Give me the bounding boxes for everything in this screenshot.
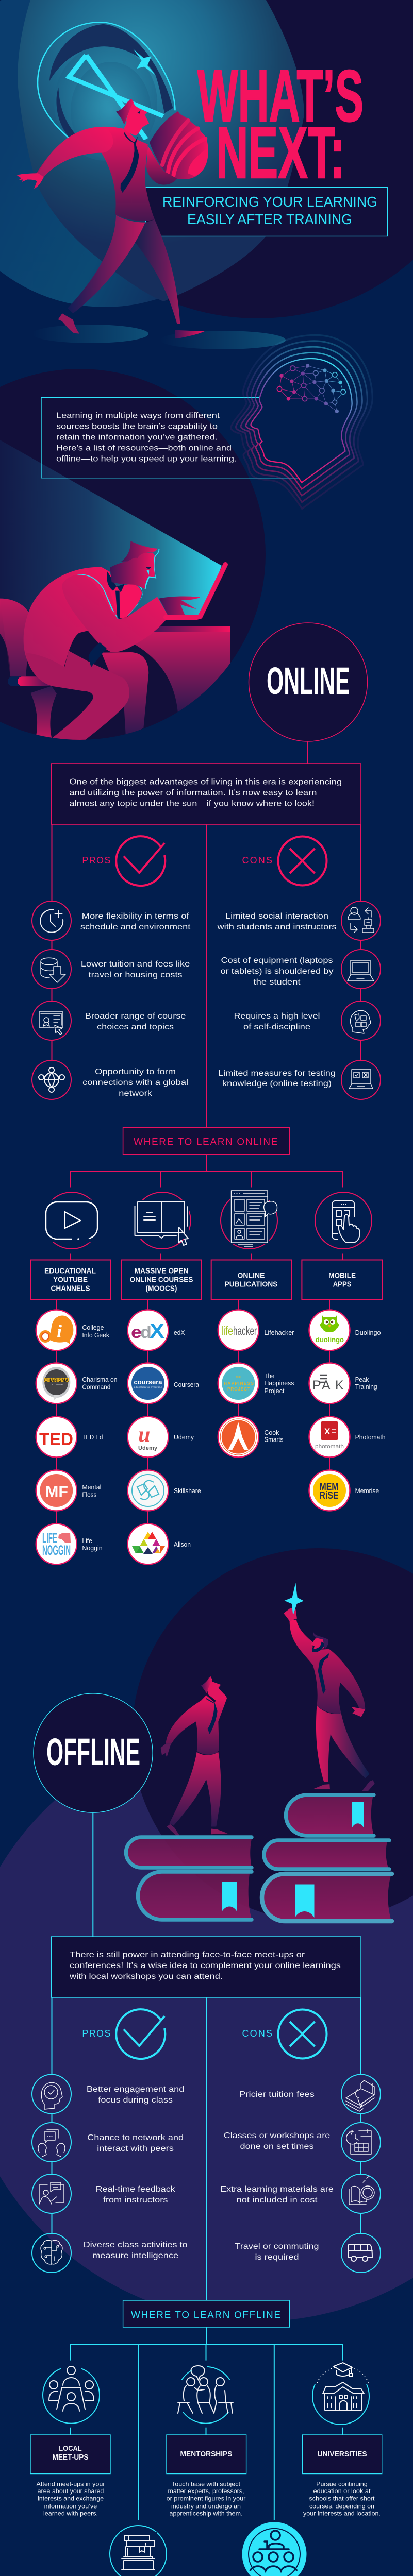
pro 3: feedback: from instructors — [103, 2196, 168, 2205]
where to learn offline heading: WHERE TO LEARN OFFLINE — [131, 2310, 280, 2320]
labels: mentorships: or prominent figures in your — [167, 2495, 245, 2502]
intro text box: Here’s a list of resources—both online and — [56, 444, 232, 452]
channel names: column one: Command — [82, 1383, 110, 1391]
pro 4: global network: Opportunity to form — [95, 1067, 176, 1076]
course logos: column two: e — [131, 1323, 142, 1342]
labels: universities: your interests and location. — [303, 2510, 381, 2517]
app logos: column four: RiSE — [320, 1490, 338, 1501]
con 3: extra materials — [220, 2174, 381, 2213]
labels: local meet-ups: learned with peers. — [43, 2510, 98, 2517]
connector lines: online pros and cons — [52, 741, 361, 1544]
publication logos: column three: life — [221, 1324, 233, 1337]
online intro panel: almost any topic under the sun—if you know where to look! — [69, 799, 315, 808]
app logos: column four: MEM — [320, 1481, 338, 1493]
intro text box — [41, 398, 298, 478]
pro 3: course choices — [32, 1001, 186, 1040]
labels: universities: education or look at — [313, 2487, 371, 2495]
publication names: column three: Happiness — [264, 1379, 294, 1387]
publication names: column three: The — [264, 1372, 274, 1380]
app names: column four: Peak — [355, 1376, 369, 1383]
cons heading online: CONS — [242, 855, 272, 866]
app logos: column four: P — [312, 1378, 321, 1393]
cons heading online — [242, 837, 327, 885]
channel names: column one — [82, 1324, 117, 1552]
icon: online publications — [221, 1190, 277, 1249]
channel logos: column one: TED — [39, 1430, 73, 1449]
offline intro panel: with local workshops you can attend. — [69, 1972, 223, 1981]
cons heading offline — [242, 2009, 327, 2059]
app logos: column four: K — [335, 1378, 344, 1393]
offline intro panel — [52, 1937, 361, 1997]
con 3: self-discipline: of self-discipline — [243, 1023, 310, 1031]
pro 1: engagement: focus during class — [98, 2096, 173, 2105]
channel logos: column one: CHARISMA — [44, 1378, 69, 1383]
publication logos: column three — [218, 1310, 259, 1457]
cons heading offline: CONS — [242, 2028, 272, 2039]
icon: local meet-ups — [43, 2365, 100, 2424]
labels: universities: UNIVERSITIES — [318, 2450, 367, 2459]
subtitle box — [145, 188, 388, 236]
course names: column two: Udemy — [174, 1433, 194, 1441]
publication names: column three — [264, 1329, 294, 1444]
light beam from laptop — [0, 440, 222, 616]
icon: books — [110, 2526, 167, 2576]
labels: mentorships: matter experts, professors, — [168, 2487, 244, 2495]
course names: column two: edX — [174, 1329, 185, 1336]
app logos: column four: X — [324, 1427, 331, 1436]
publication logos: column three: PROJECT — [227, 1386, 251, 1392]
pros heading online — [82, 836, 165, 886]
con 3: self-discipline — [234, 1001, 381, 1040]
pro 4: global network: network — [119, 1089, 153, 1098]
intro text box: retain the information you’ve gathered. — [56, 433, 218, 442]
category labels online: MASSIVE OPEN — [134, 1266, 189, 1275]
con 2: set times — [224, 2123, 381, 2162]
publication names: column three: Cook — [264, 1429, 279, 1436]
pro 2: lower fees: Lower tuition and fees like — [81, 960, 190, 969]
category labels online: EDUCATIONAL — [44, 1266, 96, 1275]
labels: local meet-ups — [30, 2435, 110, 2517]
con 4: travel: Travel or commuting — [235, 2242, 319, 2251]
subtitle box: REINFORCING YOUR LEARNING — [162, 194, 377, 210]
intro text box: Learning in multiple ways from different — [56, 411, 220, 420]
channel logos: column one: i — [57, 1321, 62, 1342]
con 2: equipment cost: Cost of equipment (laptops — [221, 956, 333, 965]
online intro panel — [52, 764, 361, 824]
channel logos: column one — [36, 1310, 77, 1564]
labels: universities — [302, 2435, 382, 2517]
channel names: column one: Mental — [82, 1483, 101, 1491]
app logos: column four: A — [322, 1378, 331, 1393]
channel names: column one: Life — [82, 1537, 92, 1545]
publication logos: column three: HAPPINESS — [224, 1381, 254, 1386]
pros heading offline: PROS — [82, 2028, 110, 2039]
channel logos: column one: NOGGIN — [42, 1543, 71, 1558]
offline badge — [34, 1693, 153, 1812]
category labels online: ONLINE COURSES — [130, 1275, 193, 1284]
course logos: column two — [128, 1310, 168, 1564]
app names: column four: Duolingo — [355, 1329, 381, 1336]
labels: universities: Pursue continuing — [316, 2480, 368, 2487]
pro 2: networking: interact with peers — [97, 2144, 174, 2153]
publication logos: column three: hacker — [233, 1324, 257, 1337]
con 3: extra materials: Extra learning materials are — [220, 2185, 334, 2194]
category labels online: ONLINE — [237, 1271, 265, 1280]
intro text box: offline—to help you speed up your learning. — [56, 454, 237, 464]
online badge: ONLINE — [267, 659, 350, 702]
course logos: column two: Udemy — [138, 1445, 158, 1451]
publication names: column three: Smarts — [264, 1436, 284, 1444]
publication names: column three: Lifehacker — [264, 1329, 294, 1336]
con 1: limited interaction: with students and instructors — [217, 923, 336, 931]
labels: local meet-ups: area about your shared — [38, 2487, 104, 2495]
icon: mobile apps — [315, 1192, 372, 1249]
icon: massive online courses — [133, 1192, 191, 1249]
pro 2: networking: Chance to network and — [87, 2133, 184, 2142]
dark circle: online backdrop — [0, 369, 266, 740]
pro 4: global network: connections with a global — [82, 1078, 188, 1087]
con 1: limited interaction: Limited social interaction — [225, 912, 328, 921]
category labels online — [30, 1260, 383, 1299]
offline badge: OFFLINE — [46, 1731, 140, 1773]
pro 1: flexibility — [32, 901, 191, 940]
pro 3: feedback: Real-time feedback — [96, 2185, 176, 2194]
app logos: column four: duolingo — [316, 1336, 344, 1344]
con 2: equipment cost — [221, 950, 381, 989]
category labels online: CHANNELS — [51, 1284, 90, 1293]
con 4: online testing — [218, 1060, 381, 1099]
channel names: column one: TED Ed — [82, 1433, 103, 1441]
category labels online: (MOOCS) — [145, 1284, 177, 1293]
channel names: column one: Info Geek — [82, 1331, 109, 1339]
channel logos: column one: MF — [45, 1483, 68, 1500]
online badge — [249, 623, 367, 741]
con 3: extra materials: not included in cost — [236, 2196, 318, 2205]
pro 1: flexibility: schedule and environment — [80, 923, 191, 931]
hero backdrop: layered circles — [0, 0, 413, 318]
pro 3: course choices: choices and topics — [97, 1023, 174, 1031]
pro 4: activities: measure intelligence — [92, 2251, 178, 2260]
pro 3: feedback — [32, 2174, 176, 2213]
category labels online: YOUTUBE — [53, 1275, 88, 1284]
category labels online: MOBILE — [328, 1271, 356, 1280]
icon: youtube channels — [43, 1192, 100, 1249]
pro 4: activities: Diverse class activities to — [84, 2241, 188, 2249]
course names: column two: Skillshare — [174, 1487, 201, 1495]
con 2: set times: done on set times — [240, 2142, 313, 2151]
labels: universities: courses, depending on — [309, 2502, 374, 2510]
subtitle box: EASILY AFTER TRAINING — [187, 211, 352, 227]
app names: column four: Training — [355, 1383, 377, 1391]
labels: universities: schools that offer short — [309, 2495, 375, 2502]
icon: ring, triangle and star — [38, 22, 175, 139]
online intro panel: and utilizing the power of information. It’s now easy to learn — [69, 788, 317, 797]
course logos: column two: education for everyone — [134, 1386, 162, 1388]
course names: column two: Coursera — [174, 1381, 200, 1388]
where to learn online heading: WHERE TO LEARN ONLINE — [134, 1137, 277, 1147]
con 4: travel: is required — [255, 2253, 299, 2262]
icon: universities — [312, 2363, 369, 2425]
where to learn online heading — [123, 1127, 289, 1155]
labels: mentorships — [167, 2435, 246, 2517]
icon: mentorships — [175, 2365, 236, 2424]
con 2: set times: Classes or workshops are — [224, 2131, 330, 2140]
illustration: man carrying brain — [17, 99, 208, 338]
labels: local meet-ups: information you’ve — [44, 2502, 97, 2510]
pro 2: networking — [32, 2123, 184, 2162]
pros heading offline — [82, 2009, 165, 2059]
con 3: self-discipline: Requires a high level — [234, 1012, 320, 1021]
pro 4: activities — [32, 2233, 188, 2273]
labels: local meet-ups: MEET-UPS — [53, 2453, 89, 2462]
app names: column four — [355, 1329, 386, 1495]
channel names: column one: Floss — [82, 1490, 97, 1498]
labels: local meet-ups: interests and exchange — [38, 2495, 104, 2502]
channel logos: column one: LIFE — [42, 1530, 57, 1546]
title — [197, 55, 364, 194]
connector lines: offline pros and cons — [52, 1813, 361, 2576]
con 1: tuition: Pricier tuition fees — [239, 2090, 315, 2099]
where to learn offline heading — [123, 2300, 289, 2327]
pro 3: course choices: Broader range of course — [85, 1012, 186, 1021]
intro text box: sources boosts the brain’s capability to — [56, 422, 218, 431]
course logos: column two: coursera — [134, 1378, 162, 1386]
offline backdrop circles — [0, 1548, 413, 2321]
course names: column two — [174, 1329, 201, 1548]
labels: mentorships: apprenticeship with them. — [169, 2510, 242, 2517]
con 4: online testing: knowledge (online testing) — [222, 1079, 332, 1088]
app names: column four: Memrise — [355, 1487, 379, 1495]
pro 2: lower fees — [32, 950, 190, 989]
channel names: column one: College — [82, 1324, 104, 1331]
publication names: column three: Project — [264, 1387, 285, 1395]
labels: local meet-ups: Attend meet-ups in your — [36, 2480, 105, 2487]
con 4: travel — [235, 2233, 381, 2273]
con 1: limited interaction — [217, 901, 381, 940]
labels: local meet-ups: LOCAL — [59, 2444, 82, 2453]
illustration: man at laptop — [0, 541, 230, 741]
publication logos: column three: THE — [236, 1376, 241, 1379]
app names: column four: Photomath — [355, 1433, 386, 1441]
pro 1: flexibility: More flexibility in terms of — [82, 912, 189, 921]
pro 4: global network — [32, 1060, 188, 1099]
con 4: online testing: Limited measures for testing — [218, 1069, 336, 1078]
con 2: equipment cost: or tablets) is shouldered by — [221, 967, 333, 976]
category labels online: PUBLICATIONS — [225, 1280, 277, 1289]
labels: mentorships: industry and undergo an — [171, 2502, 241, 2510]
pro 1: engagement: Better engagement and — [87, 2085, 184, 2094]
labels: mentorships: MENTORSHIPS — [180, 2450, 232, 2459]
online intro panel: One of the biggest advantages of living in this era is experiencing — [69, 777, 342, 786]
illustration: two men reaching for a star — [161, 1583, 375, 1836]
pro 2: lower fees: travel or housing costs — [89, 971, 183, 979]
pro 1: engagement — [32, 2074, 184, 2113]
category labels online: APPS — [333, 1280, 352, 1289]
course logos: column two: u — [138, 1423, 150, 1447]
icon: workshops or seminars — [242, 2522, 306, 2576]
pros heading online: PROS — [82, 855, 110, 866]
course logos: column two: d — [140, 1323, 152, 1342]
offline intro panel: There is still power in attending face-to-face meet-ups or — [70, 1951, 305, 1959]
app logos: column four — [309, 1310, 350, 1511]
channel names: column one: Noggin — [82, 1544, 103, 1552]
con 1: tuition — [239, 2074, 381, 2113]
labels: mentorships: Touch base with subject — [172, 2480, 241, 2487]
course logos: column two: X — [150, 1320, 164, 1343]
channel names: column one: Charisma on — [82, 1376, 117, 1383]
stacked books — [124, 1793, 392, 1923]
offline intro panel: conferences! It’s a wise idea to complement your online learnings — [70, 1961, 341, 1970]
app logos: column four: photomath — [315, 1444, 344, 1450]
icon: head with neural network — [231, 335, 372, 509]
con 2: equipment cost: the student — [254, 978, 301, 987]
course names: column two: Alison — [174, 1540, 191, 1548]
foot shadows — [32, 325, 286, 349]
channel logos: column one: ON COMMAND — [51, 1383, 63, 1386]
